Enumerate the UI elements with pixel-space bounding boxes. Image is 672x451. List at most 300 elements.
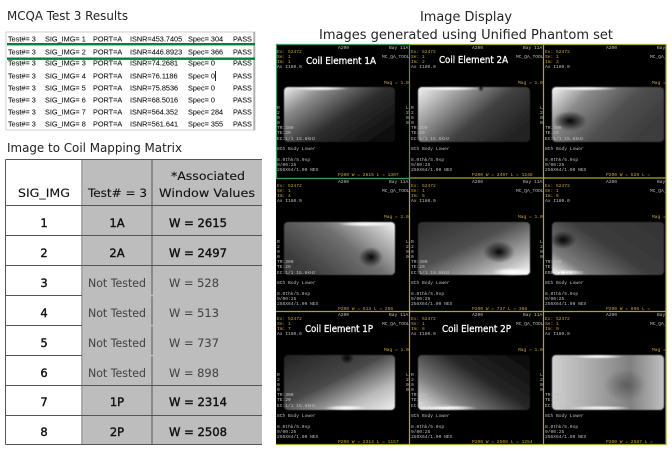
phantom image 1A (284, 86, 395, 142)
results log table: ISNR=74.2681 (130, 58, 178, 68)
overlay: panel 6 annotations: 9/00:25 (545, 296, 565, 302)
overlay: panel 9 annotations: TE:20 (545, 397, 559, 403)
overlay: panel 2 annotations: P200 W = 2497 L = 1248 (472, 172, 533, 178)
overlay: panel 8 annotations: EC:1/1 15.6kHz (411, 403, 450, 409)
overlay: panel 5 annotations: 8Ch Body Lower (411, 280, 450, 286)
overlay: panel 4 annotations: Ex: 52472 (277, 183, 302, 189)
overlay: panel 8 annotations: Mag = 1.0 (518, 347, 543, 353)
overlay: panel 3 annotations: TR:300 (545, 125, 562, 131)
phantom image 9 (552, 354, 664, 410)
table rows: 1P (110, 395, 124, 409)
overlay: panel 4 annotations: 256X64/1.00 NEX (277, 301, 319, 307)
overlay: panel 5 annotations: 0 (411, 254, 414, 260)
results log table: Spec= 0 (188, 84, 215, 92)
overlay: panel 8 annotations: 2 (540, 377, 543, 383)
overlay: panel 5 annotations: Mag = 1.0 (518, 214, 543, 220)
overlay: panel 8 annotations: Bay 11A (523, 312, 543, 318)
overlay: panel 5 annotations: TR:300 (411, 259, 428, 265)
overlay: panel 1 annotations: Se: 1 (277, 54, 291, 60)
results log table: Spec= 0 (188, 58, 215, 68)
overlay: panel 7 annotations: TE:20 (277, 397, 291, 403)
overlay: panel 3 annotations: Im: 3 (545, 59, 559, 65)
table rows: 2 (40, 246, 48, 260)
overlay: panel 9 annotations: MC_QA_ (650, 321, 667, 327)
table rows: 7 (40, 395, 48, 409)
overlay: panel 5 annotations: EC:1/1 15.6kHz (411, 270, 450, 276)
overlay: panel 8 annotations: 0 (540, 382, 543, 388)
overlay: panel 7 annotations: Bay 11A (389, 312, 409, 318)
overlay: panel 8 annotations: Se: 1 (411, 321, 425, 327)
overlay: panel 1 annotations: 0 (406, 115, 409, 121)
results log table: ISNR=446.8923 (130, 48, 182, 56)
overlay: panel 2 annotations: 0 (411, 115, 414, 121)
results log table: SIG_IMG= 6 (45, 96, 86, 104)
overlay: panel 8 annotations: Ax I180.0 (411, 331, 436, 337)
overlay: panel 7 annotations: 0 (277, 387, 280, 393)
overlay: panel 9 annotations: P200 W = 2587 L = (606, 439, 653, 445)
overlay: panel 7 annotations: R (277, 372, 280, 378)
overlay: panel 4 annotations: L (406, 239, 409, 245)
overlay: panel 6 annotations: Bay (657, 179, 666, 185)
results log table: Spec= 304 (188, 34, 223, 44)
overlay: panel 2 annotations: 2 (540, 110, 543, 116)
overlay: panel 9 annotations: A200 (606, 312, 617, 318)
results log table: SIG_IMG= 3 (45, 58, 86, 68)
overlay: panel 3 annotations: 256X64/1.00 NEX (545, 167, 587, 173)
overlay: panel 4 annotations: MC_QA_TOOL (382, 188, 410, 194)
overlay: panel 8 annotations: 0 (540, 387, 543, 393)
overlay: panel 7 annotations: Ex: 52472 (277, 316, 302, 322)
results log table: SIG_IMG= 1 (45, 34, 86, 44)
overlay: panel 8 annotations: 0 (411, 382, 414, 388)
overlay: panel 7 annotations: P200 W = 2314 L = 1157 (338, 439, 399, 445)
results log table: PASS (233, 58, 252, 68)
overlay: panel 5 annotations: R (411, 239, 414, 245)
overlay: panel 1 annotations: TE:20 (277, 130, 291, 136)
results log table: PASS (233, 120, 252, 128)
overlay: panel 2 annotations: TR:300 (411, 125, 428, 131)
overlay: panel 7 annotations: MC_QA_TOOL (382, 321, 410, 327)
overlay: panel 8 annotations: 0 (411, 387, 414, 393)
overlay: panel 2 annotations: Bay 11A (523, 45, 543, 51)
overlay: panel 9 annotations: EC:1/1 15.6kHz (545, 403, 584, 409)
results log table: SIG_IMG= 4 (45, 72, 86, 80)
overlay: panel 4 annotations (277, 179, 410, 312)
overlay: panel 6 annotations: Mag = (652, 214, 666, 220)
overlay: panel 2 annotations: Ax I180.0 (411, 64, 436, 70)
overlay: panel 7 annotations: A200 (338, 312, 349, 318)
overlay: panel 4 annotations: TR:300 (277, 259, 294, 265)
overlay: panel 1 annotations: 8Ch Body Lower (277, 146, 316, 152)
overlay: panel 4 annotations: Se: 1 (277, 188, 291, 194)
results log table: Test#= 3 (8, 120, 36, 128)
overlay: panel 6 annotations: 8Ch Body Lower (545, 280, 584, 286)
overlay: panel 5 annotations: 0 (411, 249, 414, 255)
overlay: panel 8 annotations: A200 (472, 312, 483, 318)
overlay: panel 4 annotations: EC:1/1 15.6kHz (277, 270, 316, 276)
results log table: SIG_IMG= 7 (45, 108, 86, 116)
overlay: panel 6 annotations: Ex: 52472 (545, 183, 570, 189)
overlay: panel 7 annotations: 2 (406, 377, 409, 383)
overlay: panel 9 annotations (545, 312, 667, 445)
overlay: panel 1 annotations: Bay 11A (389, 45, 409, 51)
overlay: panel 2 annotations: Im: 2 (411, 59, 425, 65)
overlay: panel 9 annotations: Mag = (652, 347, 666, 353)
results log table: Spec= 355 (188, 120, 223, 128)
overlay: panel 5 annotations: TE:20 (411, 264, 425, 270)
overlay: panel 5 annotations: MC_QA_TOOL (516, 188, 544, 194)
overlay: panel 8 annotations: R (411, 372, 414, 378)
overlay: panel 8 annotations: 9/00:25 (411, 429, 431, 435)
overlay: panel 3 annotations: TE:20 (545, 130, 559, 136)
results log table: ISNR=76.1186 (130, 72, 178, 80)
table rows: Not Tested (88, 366, 146, 380)
overlay: panel 9 annotations: TR:300 (545, 392, 562, 398)
overlay: panel 7 annotations: 0 (406, 382, 409, 388)
overlay: panel 5 annotations: A200 (472, 179, 483, 185)
overlay: panel 4 annotations: 8.0thk/5.0sp (277, 291, 310, 297)
results log table: SIG_IMG= 8 (45, 120, 86, 128)
table rows: 8 (40, 425, 48, 439)
results log table: PASS (233, 72, 252, 80)
overlay: panel 1 annotations: 2 (406, 110, 409, 116)
header row: *Associated (171, 169, 245, 183)
overlay: panel 4 annotations: Bay 11A (389, 179, 409, 185)
table rows: W = 737 (169, 336, 219, 350)
results log table: ISNR=561.641 (130, 120, 178, 128)
results log table: PORT=A (93, 120, 122, 128)
phantom image 5 (418, 222, 532, 276)
results log table: ISNR=453.7405 (130, 34, 182, 44)
overlay: panel 2 annotations: 256X64/1.00 NEX (411, 167, 453, 173)
table rows: 4 (40, 306, 48, 320)
results log table: PASS (233, 108, 252, 116)
results log table: PORT=A (93, 58, 122, 68)
overlay: panel 8 annotations: P200 W = 2508 L = 1254 (472, 439, 533, 445)
overlay: panel 2 annotations: TE:20 (411, 130, 425, 136)
header row: SIG_IMG (18, 186, 70, 200)
heading: MCQA Test 3 Results: MCQA Test 3 Results (7, 8, 128, 23)
header row: Test# = 3 (87, 186, 147, 200)
table rows: W = 2508 (169, 425, 227, 439)
table rows: W = 2615 (169, 216, 227, 230)
overlay: panel 4 annotations: A200 (338, 179, 349, 185)
overlay: panel 4 annotations: 0 (406, 254, 409, 260)
overlay: panel 7 annotations: 0 (406, 387, 409, 393)
overlay: panel 9 annotations: Se: 1 (545, 321, 559, 327)
viewer grid lines (276, 44, 666, 445)
results log table: Test#= 3 (8, 48, 36, 56)
label: Coil Element 2A: Coil Element 2A (439, 55, 508, 66)
results log table: Test#= 3 (8, 108, 36, 116)
results log table: ISNR=68.5016 (130, 96, 178, 104)
overlay: panel 2 annotations: Mag = 1.0 (518, 80, 543, 86)
overlay: panel 1 annotations (277, 45, 410, 178)
overlay: panel 7 annotations: EC:1/1 15.6kHz (277, 403, 316, 409)
overlay: panel 8 annotations: 8Ch Body Lower (411, 413, 450, 419)
results log table: Spec= 284 (188, 108, 223, 116)
overlay: panel 2 annotations: Ex: 52472 (411, 49, 436, 55)
overlay: panel 8 annotations (411, 312, 544, 445)
overlay: panel 6 annotations: TE:20 (545, 264, 559, 270)
heading: Images generated using Unified Phantom set: Images generated using Unified Phantom set (319, 27, 613, 43)
table rows: 2P (110, 425, 124, 439)
results log table: PORT=A (93, 96, 122, 104)
overlay: panel 2 annotations: L (540, 105, 543, 111)
overlay: panel 9 annotations: 8Ch Body Lower (545, 413, 584, 419)
table rows: W = 513 (169, 306, 219, 320)
overlay: panel 6 annotations: Im: 6 (545, 193, 559, 199)
overlay: panel 2 annotations: 0 (411, 120, 414, 126)
overlay: panel 2 annotations: 0 (540, 120, 543, 126)
header row: Window Values (159, 186, 255, 200)
table rows: Not Tested (88, 276, 146, 290)
overlay: panel 9 annotations: 9/00:25 (545, 429, 565, 435)
phantom image 6 (547, 222, 664, 275)
overlay: panel 4 annotations: 0 (277, 254, 280, 260)
results log table: Test#= 3 (8, 58, 36, 68)
overlay: panel 3 annotations (545, 45, 667, 178)
overlay: panel 6 annotations (545, 179, 667, 312)
results log table: Test#= 3 (8, 84, 36, 92)
overlay: panel 7 annotations: TR:300 (277, 392, 294, 398)
overlay: panel 8 annotations: 8.0thk/5.0sp (411, 424, 444, 430)
results log table: PASS (233, 84, 252, 92)
phantom image 3 (551, 86, 664, 142)
overlay: panel 5 annotations: Im: 5 (411, 193, 425, 199)
overlay: panel 2 annotations: 2 (411, 110, 414, 116)
results log table: PORT=A (93, 34, 122, 44)
results log table: PASS (233, 96, 252, 104)
heading: Image Display: Image Display (420, 9, 512, 25)
overlay: panel 8 annotations: MC_QA_TOOL (516, 321, 544, 327)
overlay: panel 4 annotations: Mag = 1.0 (384, 214, 409, 220)
table rows: W = 528 (169, 276, 219, 290)
overlay: panel 1 annotations: Ax I180.0 (277, 64, 302, 70)
overlay: panel 4 annotations: Ax I180.0 (277, 198, 302, 204)
label: Coil Element 2P: Coil Element 2P (442, 324, 511, 335)
overlay: panel 5 annotations (411, 179, 544, 312)
overlay: panel 1 annotations: A200 (338, 45, 349, 51)
overlay: panel 6 annotations: A200 (606, 179, 617, 185)
overlay: panel 5 annotations: 0 (540, 254, 543, 260)
overlay: panel 2 annotations: Se: 1 (411, 54, 425, 60)
label: Coil Element 1A: Coil Element 1A (306, 56, 376, 67)
overlay: panel 7 annotations: 8Ch Body Lower (277, 413, 316, 419)
overlay: panel 6 annotations: 8.0thk/5.0sp (545, 291, 578, 297)
overlay: panel 7 annotations: Ax I180.0 (277, 331, 302, 337)
results log table: Test#= 3 (8, 96, 36, 104)
overlay: panel 2 annotations: R (411, 105, 414, 111)
results log table: Test#= 3 (8, 72, 36, 80)
overlay: panel 7 annotations: 8.0thk/5.0sp (277, 424, 310, 430)
overlay: panel 1 annotations: L (406, 105, 409, 111)
overlay: panel 3 annotations: 8Ch Body Lower (545, 146, 584, 152)
overlay: panel 5 annotations: L (540, 239, 543, 245)
overlay: panel 1 annotations: Ex: 52472 (277, 49, 302, 55)
overlay: panel 5 annotations: 8.0thk/5.0sp (411, 291, 444, 297)
results log table: ISNR=75.8536 (130, 84, 178, 92)
overlay: panel 4 annotations: 0 (277, 249, 280, 255)
table rows: 3 (40, 276, 48, 290)
overlay: panel 3 annotations: Se: 1 (545, 54, 559, 60)
overlay: panel 3 annotations: MC_QA_ (650, 54, 667, 60)
table rows: 5 (40, 336, 48, 350)
overlay: panel 2 annotations: 8.0thk/5.0sp (411, 157, 444, 163)
overlay: panel 8 annotations: Im: 8 (411, 326, 425, 332)
overlay: panel 3 annotations: EC:1/1 15.6kHz (545, 136, 584, 142)
overlay: panel 9 annotations: Ex: 52472 (545, 316, 570, 322)
table rows: 1 (40, 216, 48, 230)
overlay: panel 1 annotations: TR:300 (277, 125, 294, 131)
overlay: panel 4 annotations: 2 (277, 244, 280, 250)
overlay: panel 1 annotations: P200 W = 2615 L = 1307 (338, 172, 399, 178)
overlay: panel 5 annotations: Ex: 52472 (411, 183, 436, 189)
results log table: PORT=A (93, 48, 122, 56)
overlay: panel 5 annotations: Bay 11A (523, 179, 543, 185)
overlay: panel 4 annotations: 2 (406, 244, 409, 250)
overlay: panel 1 annotations: 0 (406, 120, 409, 126)
overlay: panel 3 annotations: 9/00:25 (545, 162, 565, 168)
overlay: panel 8 annotations: TE:20 (411, 397, 425, 403)
overlay: panel 7 annotations: 2 (277, 377, 280, 383)
results log table: PORT=A (93, 72, 122, 80)
overlay: panel 7 annotations: Mag = 1.0 (384, 347, 409, 353)
table rows: W = 2314 (169, 395, 227, 409)
results log table: Spec= 0 (188, 96, 215, 104)
table rows: Not Tested (88, 336, 146, 350)
overlay: panel 2 annotations: 0 (540, 115, 543, 121)
overlay: panel 8 annotations: 2 (411, 377, 414, 383)
table rows: W = 2497 (169, 246, 227, 260)
overlay: panel 6 annotations: Se: 1 (545, 188, 559, 194)
overlay: panel 4 annotations: 9/00:25 (277, 296, 297, 302)
overlay: panel 2 annotations: 9/00:25 (411, 162, 431, 168)
overlay: panel 3 annotations: P200 W = 528 L = (606, 172, 650, 178)
heading: Image to Coil Mapping Matrix: Image to Coil Mapping Matrix (7, 140, 182, 155)
phantom image 2A (418, 84, 530, 142)
image display viewer (276, 44, 667, 445)
overlay: panel 4 annotations: 8Ch Body Lower (277, 280, 316, 286)
overlay: panel 7 annotations: 9/00:25 (277, 429, 297, 435)
overlay: panel 7 annotations: 0 (277, 382, 280, 388)
overlay: panel 8 annotations: L (540, 372, 543, 378)
overlay: panel 7 annotations: L (406, 372, 409, 378)
overlay: panel 1 annotations: 8.0thk/5.0sp (277, 157, 310, 163)
results log table: PORT=A (93, 84, 122, 92)
phantom image 4 (284, 222, 395, 275)
results log table (6, 32, 255, 130)
results log table: SIG_IMG= 5 (45, 84, 86, 92)
phantom image 2P (418, 355, 530, 410)
overlay: panel 5 annotations: P200 W = 737 L = 368 (472, 306, 527, 312)
overlay: panel 6 annotations: P200 W = 898 L = (606, 306, 650, 312)
overlay: panel 5 annotations: 2 (540, 244, 543, 250)
results log table: Spec= 366 (188, 48, 223, 56)
overlay: panel 6 annotations: TR:300 (545, 259, 562, 265)
overlay: panel 5 annotations: Ax I180.0 (411, 198, 436, 204)
overlay: panel 4 annotations: Im: 4 (277, 193, 291, 199)
overlay: panel 1 annotations: R (277, 105, 280, 111)
header row (18, 169, 255, 200)
results log table: Spec= 0 (188, 72, 215, 80)
overlay: panel 6 annotations: MC_QA_ (650, 188, 667, 194)
table rows: 1A (109, 216, 125, 230)
overlay: panel 6 annotations: Ax I180.0 (545, 198, 570, 204)
results log table: SIG_IMG= 2 (45, 48, 86, 56)
results log table: PORT=A (93, 108, 122, 116)
overlay: panel 3 annotations: 8.0thk/5.0sp (545, 157, 578, 163)
phantom image 1P (284, 352, 395, 410)
results log table: ISNR=564.352 (130, 108, 178, 116)
results log table: PASS (233, 34, 252, 44)
overlay: panel 1 annotations: MC_QA_TOOL (382, 54, 410, 60)
overlay: panel 7 annotations: Se: 1 (277, 321, 291, 327)
overlay: panel 8 annotations: TR:300 (411, 392, 428, 398)
overlay: panel 9 annotations: 8.0thk/5.0sp (545, 424, 578, 430)
overlay: panel 4 annotations: 0 (406, 249, 409, 255)
overlay: panel 5 annotations: 256X64/1.00 NEX (411, 301, 453, 307)
overlay: panel 1 annotations: Im: 1 (277, 59, 291, 65)
overlay: panel 3 annotations: A200 (606, 45, 617, 51)
overlay: panel 7 annotations (277, 312, 410, 445)
overlay: panel 1 annotations: 0 (277, 115, 280, 121)
overlay: panel 5 annotations: 2 (411, 244, 414, 250)
overlay: panel 1 annotations: Mag = 1.0 (384, 80, 409, 86)
overlay: panel 2 annotations: MC_QA_TOOL (516, 54, 544, 60)
overlay: panel 4 annotations: R (277, 239, 280, 245)
overlay: panel 2 annotations: A200 (472, 45, 483, 51)
table rows: 6 (40, 366, 48, 380)
overlay: panel 1 annotations: 0 (277, 120, 280, 126)
overlay: panel 5 annotations: Se: 1 (411, 188, 425, 194)
overlay: panel 4 annotations: P200 W = 513 L = 256 (338, 306, 393, 312)
overlay: panel 2 annotations: 8Ch Body Lower (411, 146, 450, 152)
overlay: panel 6 annotations: 256X64/1.00 NEX (545, 301, 587, 307)
green highlight around row 2 (7, 43, 255, 60)
results log table: PASS (233, 48, 252, 56)
overlay: panel 3 annotations: Ex: 52472 (545, 49, 570, 55)
overlay: panel 7 annotations: Im: 7 (277, 326, 291, 332)
overlay: panel 1 annotations: EC:1/1 15.6kHz (277, 136, 316, 142)
overlay: panel 3 annotations: Bay (657, 45, 666, 51)
overlay: panel 9 annotations: Ax I180.0 (545, 331, 570, 337)
label: Coil Element 1P: Coil Element 1P (305, 324, 373, 335)
overlay: panel 1 annotations: 9/00:25 (277, 162, 297, 168)
overlay: panel 4 annotations: TE:20 (277, 264, 291, 270)
overlay: panel 2 annotations (411, 45, 544, 178)
table rows (40, 216, 227, 439)
overlay: panel 8 annotations: Ex: 52472 (411, 316, 436, 322)
results log table: Test#= 3 (8, 34, 36, 44)
overlay: panel 6 annotations: EC:1/1 15.6kHz (545, 270, 584, 276)
overlay: panel 3 annotations: Mag = (652, 80, 666, 86)
overlay: panel 9 annotations: 256X64/1.00 NEX (545, 434, 587, 440)
table rows: Not Tested (88, 306, 146, 320)
overlay: panel 3 annotations: Ax I180.0 (545, 64, 570, 70)
table rows: W = 898 (169, 366, 219, 380)
overlay: panel 8 annotations: 256X64/1.00 NEX (411, 434, 453, 440)
table rows: 2A (109, 246, 125, 260)
overlay: panel 2 annotations: EC:1/1 15.6kHz (411, 136, 450, 142)
overlay: panel 5 annotations: 9/00:25 (411, 296, 431, 302)
overlay: panel 5 annotations: 0 (540, 249, 543, 255)
overlay: panel 9 annotations: Bay (657, 312, 666, 318)
mapping matrix table (6, 159, 262, 444)
overlay: panel 1 annotations: 2 (277, 110, 280, 116)
overlay: panel 9 annotations: Im: 9 (545, 326, 559, 332)
overlay: panel 1 annotations: 256X64/1.00 NEX (277, 167, 319, 173)
